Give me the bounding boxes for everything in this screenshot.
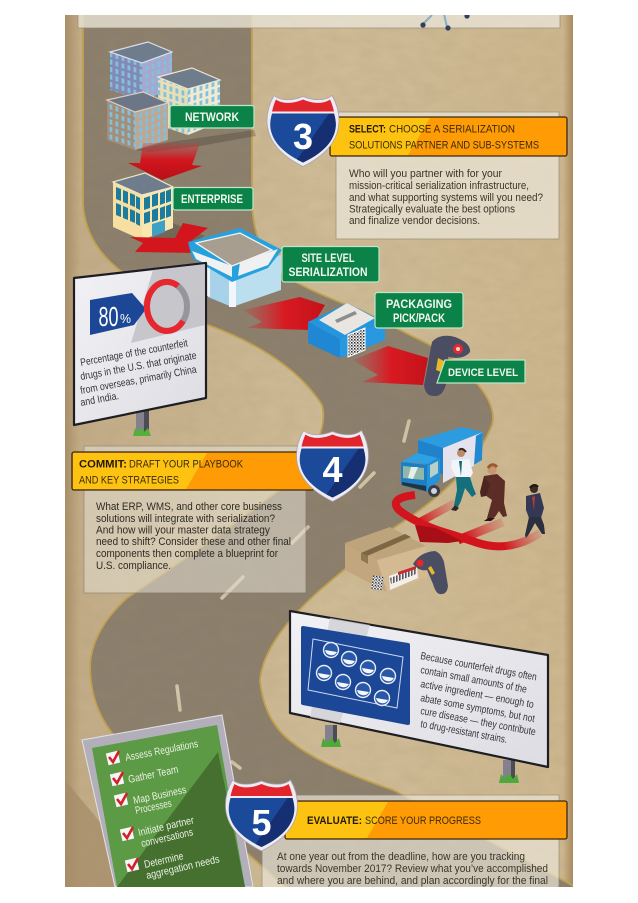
shield: 4: 4 <box>322 449 343 490</box>
heading bar: evaluate <box>285 801 567 839</box>
heading bar: evaluate: SCORE YOUR PROGRESS <box>365 815 481 827</box>
label: network: NETWORK <box>185 112 240 124</box>
panel: commit body: components then complete a blueprint for <box>96 548 278 560</box>
person: white shirt <box>451 449 476 511</box>
panel: commit body <box>84 446 306 593</box>
panel: select body: mission-critical serialization infrastructure, <box>349 180 529 192</box>
arrow: packaging to device <box>353 346 428 385</box>
panel: commit body: And how will your master data strategy <box>96 524 270 536</box>
icon: cardboard box with barcode <box>345 527 428 592</box>
label: enterprise: ENTERPRISE <box>181 194 243 206</box>
blue percent tag: 80 <box>98 301 118 332</box>
panel: checklist sign <box>82 715 253 887</box>
heading bar: commit: AND KEY STRATEGIES <box>79 474 179 486</box>
label: packaging pick/pack: PACKAGING <box>386 299 452 311</box>
sign: 80 percent statistic: and India. <box>79 390 120 409</box>
sign: counterfeit pills: to drug-resistant strains. <box>419 718 508 746</box>
icon: delivery truck <box>401 427 483 497</box>
shield: 5 <box>226 780 298 851</box>
label: site level serialization: SITE LEVEL <box>302 253 354 265</box>
heading bar: commit: COMMIT: <box>79 458 127 470</box>
paper background <box>65 15 573 887</box>
sign: counterfeit pills: Because counterfeit drugs often <box>419 650 538 683</box>
icon: scanner at box <box>413 551 448 594</box>
label: device level <box>437 360 525 383</box>
panel: select body: Strategically evaluate the best options <box>349 204 515 216</box>
label: packaging pick/pack: PICK/PACK <box>393 313 446 325</box>
panel: commit body: need to shift? Consider these and other final <box>96 536 291 548</box>
check item: initiate partner conversations: conversations <box>140 826 194 850</box>
check item: assess regulations <box>106 738 199 765</box>
person: brown suit <box>480 465 507 521</box>
sign: 80 percent statistic: Percentage of the counterfeit <box>79 337 189 369</box>
sign: counterfeit pills: contain small amounts of the <box>419 664 528 696</box>
panel: evaluate body: At one year out from the deadline, how are you tracking <box>277 851 525 863</box>
check item: map business processes: Map Business <box>132 784 187 807</box>
panel: select body: Who will you partner with for your <box>349 168 502 180</box>
label: enterprise <box>173 188 253 210</box>
icon: packaging box <box>308 303 385 358</box>
shield: 3: 3 <box>293 116 313 157</box>
panel: select body: and finalize vendor decisions. <box>349 215 480 227</box>
check item: gather team: Gather Team <box>127 764 180 786</box>
heading bar: commit <box>72 452 314 490</box>
panel: select body <box>336 112 559 239</box>
check item: initiate partner conversations <box>120 814 196 850</box>
donut chart <box>147 282 187 331</box>
top panel strip with network nodes <box>78 15 560 31</box>
panel: evaluate body: and where you are behind, and plan accordingly for the final <box>277 875 548 887</box>
heading bar: select <box>330 117 567 156</box>
blue percent tag <box>90 293 146 335</box>
winding road <box>83 10 600 900</box>
road dashes <box>177 421 409 768</box>
sign: counterfeit pills: abate some symptoms, but not <box>419 692 536 725</box>
panel: commit body: solutions will integrate with serialization? <box>96 513 275 525</box>
sign: counterfeit pills <box>290 611 548 783</box>
heading bar: evaluate: EVALUATE: <box>307 815 362 827</box>
label: network <box>170 106 254 128</box>
heading bar: select: SOLUTIONS PARTNER AND SUB-SYSTEMS <box>349 140 539 152</box>
check item: map business processes <box>114 784 187 817</box>
icon: network buildings <box>107 42 256 152</box>
sign: 80 percent statistic <box>74 263 206 436</box>
icon: site level store <box>188 228 282 307</box>
arrow: enterprise to site <box>130 223 208 253</box>
sign: 80 percent statistic: from overseas, primarily China <box>79 364 198 397</box>
heading bar: commit: DRAFT YOUR PLAYBOOK <box>129 458 244 470</box>
panel: select body: and what supporting systems will you need? <box>349 192 543 204</box>
label: device level: DEVICE LEVEL <box>448 367 518 379</box>
panel: evaluate body <box>262 795 559 895</box>
sign: counterfeit pills: cure disease — they contribute <box>419 705 537 738</box>
paper texture <box>232 282 476 765</box>
shield: 5: 5 <box>251 802 272 843</box>
heading bar: select: CHOOSE A SERIALIZATION <box>389 124 515 136</box>
person: dark suit <box>525 485 545 538</box>
label: packaging pick/pack <box>375 292 463 328</box>
sign: counterfeit pills: active ingredient — enough to <box>419 678 535 711</box>
panel: commit body: What ERP, WMS, and other core business <box>96 501 282 513</box>
sign: 80 percent statistic: drugs in the U.S. that originate <box>79 350 198 383</box>
icon: three business people <box>451 449 545 538</box>
panel: evaluate body: towards November 2017? Review what you’ve accomplished <box>277 863 548 875</box>
check item: determine aggregation needs <box>125 850 221 882</box>
blue percent tag: % <box>120 311 131 326</box>
label: site level serialization: SERIALIZATION <box>288 267 368 279</box>
icon: delivery arrows <box>396 495 540 546</box>
check item: determine aggregation needs: aggregation needs <box>145 853 221 882</box>
check item: determine aggregation needs: Determine <box>143 850 185 871</box>
check item: map business processes: Processes <box>134 798 173 817</box>
check item: gather team <box>110 764 180 786</box>
arrow: network to enterprise <box>128 143 202 180</box>
heading bar: select: SELECT: <box>349 124 386 136</box>
check item: initiate partner conversations: Initiate partner <box>137 814 196 839</box>
icon: handheld scanner <box>424 336 470 396</box>
check item: assess regulations: Assess Regulations <box>124 738 199 764</box>
panel: commit body: U.S. compliance. <box>96 560 171 572</box>
shield: 3 <box>267 96 339 166</box>
pill blister panel <box>303 628 408 723</box>
label: site level serialization <box>282 246 379 282</box>
arrow: site to packaging <box>243 297 325 330</box>
shield: 4 <box>296 430 368 502</box>
icon: enterprise building <box>113 173 205 250</box>
